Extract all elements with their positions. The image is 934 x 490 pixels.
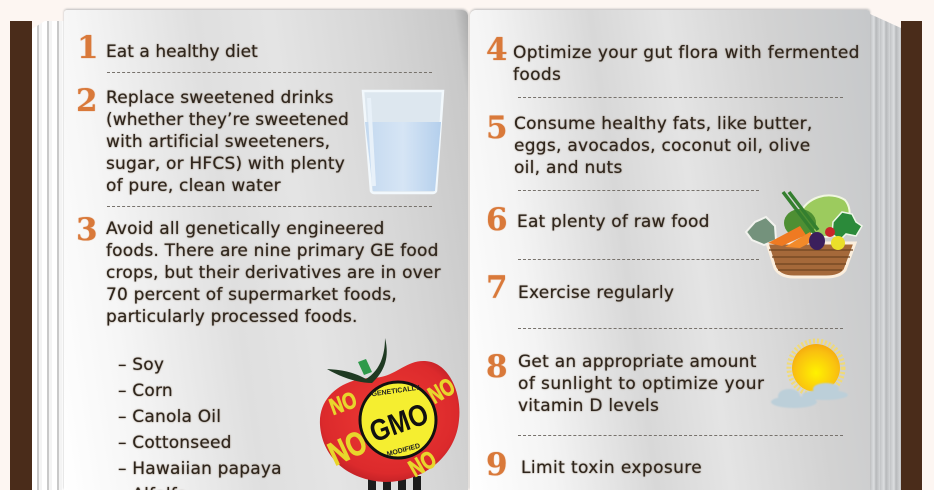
item 8: 8 [486,349,508,385]
item 5: Consume healthy fats, like butter, [514,114,813,134]
item 3: particularly processed foods. [106,307,358,327]
item 3: 3 [76,212,98,248]
item 3 [76,212,442,327]
icon: vegetable basket [745,191,863,278]
icon: glass of water [362,90,444,194]
GE crops list: – Hawaiian papaya [118,459,282,479]
item 2: of pure, clean water [106,176,281,196]
item 7 [486,270,674,306]
item 5 [486,110,813,178]
item 6: 6 [486,202,508,238]
right book cover [901,21,922,490]
item 7: Exercise regularly [518,283,674,303]
item 8 [486,349,765,416]
GE crops list [118,355,282,490]
item 2: 2 [76,83,98,119]
item 2: sugar, or HFCS) with plenty [106,154,345,174]
item 7: 7 [486,270,508,306]
item 6: Eat plenty of raw food [517,212,710,232]
GE crops list: – Cottonseed [118,433,232,453]
icon: no GMO tomato [320,338,460,490]
item 8: of sunlight to optimize your [518,374,764,394]
item 4: Optimize your gut flora with fermented [513,43,860,63]
left page stack [32,21,64,490]
icon: no GMO tomato: NO [326,386,360,420]
left book cover [10,21,32,490]
item 1: 1 [77,30,99,66]
icon: no GMO tomato: NO [322,423,372,472]
item 3: 70 percent of supermarket foods, [106,285,397,305]
icon: no GMO tomato: NO [404,446,441,483]
item 8: Get an appropriate amount [518,352,757,372]
item 2 [76,83,349,196]
item 1 [77,30,258,66]
item 5: 5 [486,110,508,146]
GE crops list: – Canola Oil [118,407,221,427]
item 4 [486,32,860,85]
item 4: 4 [486,32,508,68]
item 6 [486,202,710,238]
left page [64,10,468,490]
item 5: eggs, avocados, coconut oil, olive [514,136,811,156]
GE crops list: – Soy [118,355,164,375]
item 3: Avoid all genetically engineered [106,219,385,239]
item 1: Eat a healthy diet [106,42,258,62]
item 9 [486,447,702,483]
item 2: Replace sweetened drinks [106,88,334,108]
icon: sun and clouds [770,338,848,408]
item 3: foods. There are nine primary GE food [106,241,439,261]
icon: no GMO tomato: MODIFIED [386,443,421,458]
item 9: 9 [486,447,508,483]
item 8: vitamin D levels [518,396,659,416]
icon: no GMO tomato: GENETICALLY [371,385,421,398]
item 9: Limit toxin exposure [521,458,702,478]
item 4: foods [513,65,561,85]
item 3: crops, but their derivatives are in over [106,263,441,283]
item 5: oil, and nuts [514,158,623,178]
right page stack [870,14,901,490]
GE crops list: – Corn [118,381,173,401]
right page [470,10,870,490]
item 2: (whether they’re sweetened [106,110,349,130]
item 2: with artificial sweeteners, [106,132,330,152]
icon: no GMO tomato: GMO [365,398,433,449]
